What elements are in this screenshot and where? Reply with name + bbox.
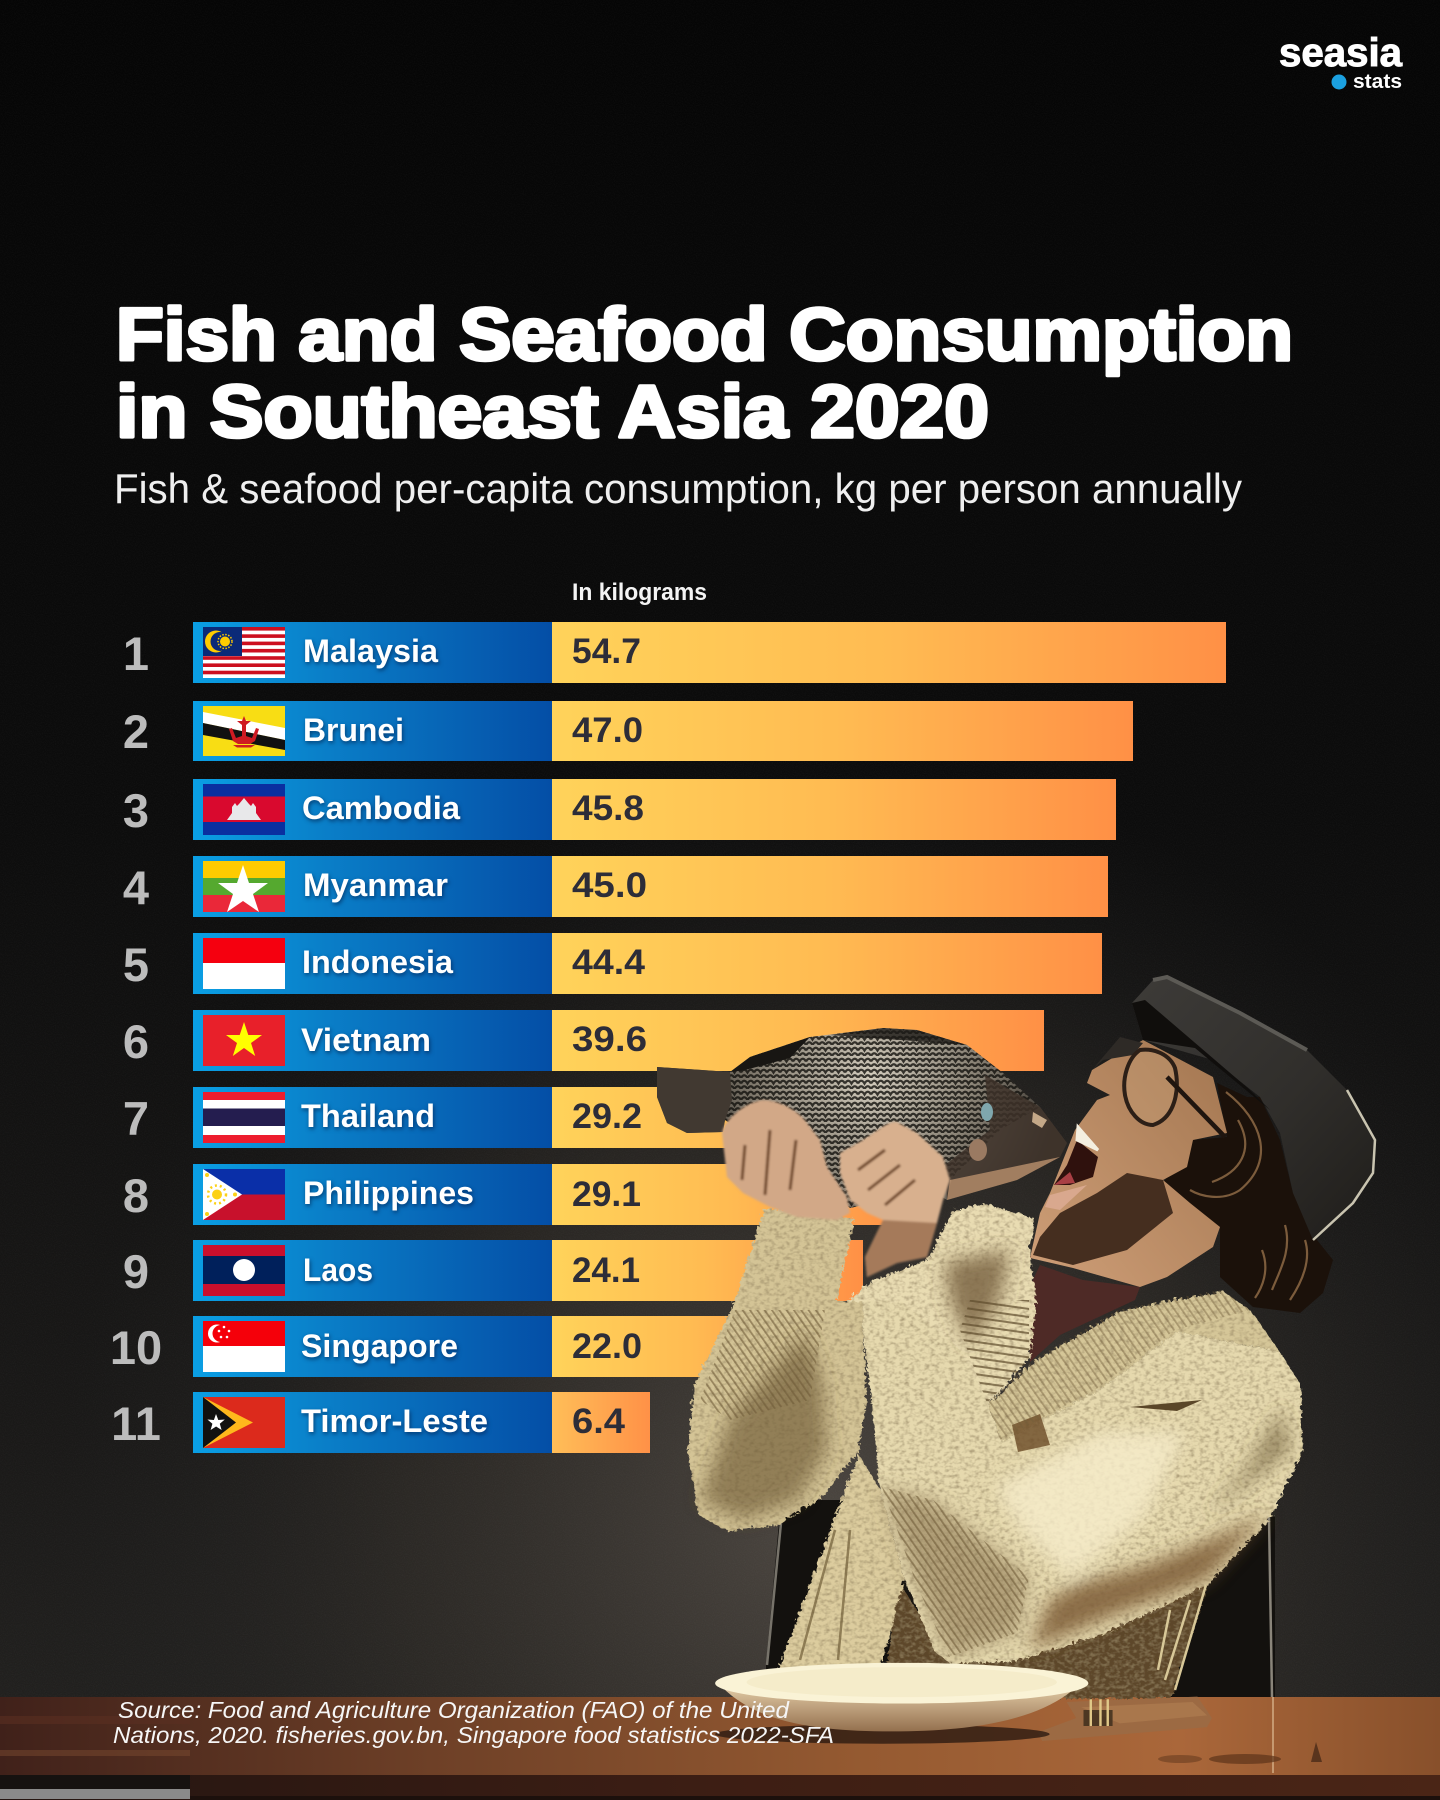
man eating fish illustration [657,977,1375,1744]
row: Indonesia: Indonesia [302,944,453,980]
row: Myanmar: 45.0 [572,866,647,905]
row: Cambodia: Cambodia [302,790,460,826]
row: Timor-Leste: 11 [111,1397,161,1450]
flag: Laos [203,1245,285,1296]
row: Indonesia: 5 [123,938,149,991]
sweater knit details [700,1290,1250,1690]
row: Laos: Laos [303,1252,373,1288]
row: Singapore: Singapore [301,1328,458,1364]
row: Timor-Leste: 6.4 [572,1402,626,1441]
row: Laos: 24.1 [572,1251,640,1290]
flag: Timor-Leste [203,1397,285,1448]
flag: Singapore [203,1321,285,1372]
turtleneck [1028,1265,1140,1362]
flag: Philippines [203,1169,285,1220]
sweater [686,1202,1301,1697]
row: Cambodia: 3 [123,784,149,837]
napkin and fork [1037,1697,1212,1741]
row: Indonesia: 44.4 [572,943,646,982]
row: Singapore: 22.0 [572,1327,642,1366]
flag: Indonesia [203,938,285,989]
row: Myanmar [123,856,1108,917]
subtitle: Fish & seafood per-capita consumption, kg per person annually [114,465,1242,512]
source note: Nations, 2020. fisheries.gov.bn, Singapore food statistics 2022-SFA [113,1722,834,1748]
row: Thailand: Thailand [301,1098,435,1134]
row: Philippines: 8 [123,1169,149,1222]
flag: Vietnam [203,1015,285,1066]
hair [1163,1083,1333,1313]
chair [766,1500,1275,1697]
sweater left torso panel [777,1453,903,1668]
logo: stats [1353,71,1402,93]
flag: Malaysia [203,627,285,678]
bar chart [110,622,1226,1453]
row: Timor-Leste [111,1392,650,1453]
row: Indonesia [123,933,1102,994]
row: Timor-Leste: Timor-Leste [301,1403,488,1439]
beard [1033,1173,1173,1265]
row: Singapore [110,1316,832,1377]
source note: Source: Food and Agriculture Organization (FAO) of the United [118,1697,790,1723]
glasses [1092,1037,1225,1137]
flat cap [1132,977,1375,1240]
title: in Southeast Asia 2020 [116,370,989,453]
collar [987,1290,1278,1440]
row: Laos [123,1240,863,1301]
row: Malaysia: Malaysia [303,633,438,669]
row: Cambodia [123,779,1116,840]
face [1030,1040,1227,1287]
flag: Brunei [203,706,285,756]
right arm [861,1300,1301,1662]
row: Brunei: 47.0 [572,711,643,750]
title: Fish and Seafood Consumption [116,293,1293,376]
fish [657,1028,1067,1208]
row: Vietnam: 6 [123,1015,149,1068]
row: Laos: 9 [123,1245,149,1298]
row: Singapore: 10 [110,1321,162,1374]
source note [113,1697,834,1748]
cuff and shoulder fold [845,1202,1035,1403]
mouth [1054,1140,1098,1185]
row: Philippines [123,1164,910,1225]
left sleeve [686,1207,865,1530]
row: Vietnam: 39.6 [572,1020,647,1059]
row: Vietnam: Vietnam [301,1022,431,1058]
row: Malaysia: 54.7 [572,632,641,671]
logo: seasia [1279,31,1403,75]
row: Philippines: Philippines [303,1175,474,1211]
row: Thailand [123,1087,912,1148]
axis label: In kilograms [572,579,707,606]
flag: Thailand [203,1092,285,1143]
row: Malaysia [123,622,1226,683]
row: Myanmar: 4 [123,861,149,914]
flag: Myanmar [203,861,285,912]
plate [715,1663,1088,1744]
row: Thailand: 7 [123,1092,149,1145]
row: Brunei: Brunei [303,712,404,748]
row: Myanmar: Myanmar [303,867,448,903]
row: Thailand: 29.2 [572,1097,642,1136]
hands [722,1100,950,1277]
sweater lower torso [882,1577,1206,1697]
row: Vietnam [123,1010,1044,1071]
row: Brunei: 2 [123,705,149,758]
row: Cambodia: 45.8 [572,789,644,828]
row: Brunei [123,701,1133,761]
row: Philippines: 29.1 [572,1175,641,1214]
flag: Cambodia [203,784,285,835]
row: Malaysia: 1 [123,627,149,680]
title [116,293,1293,453]
wooden table [0,1697,1440,1800]
sweater soft shading [701,1250,1290,1657]
